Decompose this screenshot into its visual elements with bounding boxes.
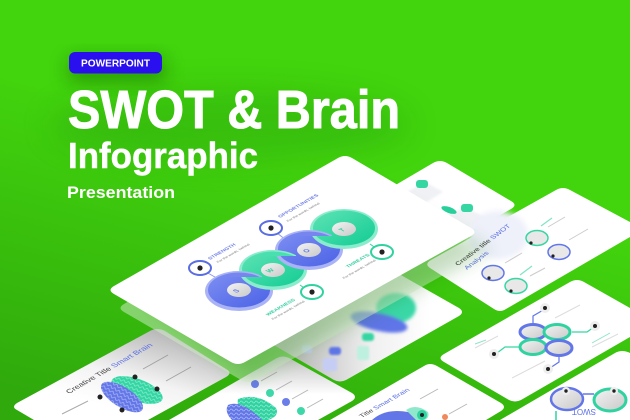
slide: bottom center brain <box>330 364 504 420</box>
slide title text: Creative title SWOT <box>454 223 513 267</box>
icon: threats <box>370 244 393 259</box>
main slide shadow <box>140 175 490 380</box>
label: strength: STRENGTH <box>207 243 238 261</box>
inner disc T: T <box>338 228 347 233</box>
label: opportunities: OPPORTUNITIES <box>277 193 321 219</box>
cycle circles <box>551 387 626 420</box>
overlap S <box>228 271 262 277</box>
list bullets <box>251 372 323 415</box>
slide title text: Creative Title Smart Brain <box>64 342 155 395</box>
circle W <box>239 250 307 290</box>
icon dots <box>98 374 160 412</box>
translucent glass layer <box>120 174 484 382</box>
POWERPOINT badge <box>69 52 162 74</box>
inner disc S: S <box>232 288 242 294</box>
label: strength: For the words, behind <box>216 243 251 264</box>
slide: four-circle SWOT <box>440 280 630 402</box>
circle S <box>205 271 273 311</box>
slide subtitle text: Analysis <box>463 250 491 271</box>
slide: bottom left brain <box>14 329 230 420</box>
circles S W T O <box>520 324 572 356</box>
label: weakness: WEAKNESS <box>265 298 298 317</box>
blurred brain graphic <box>349 293 416 337</box>
inner disc S <box>227 283 251 297</box>
slide: blurred brain <box>253 262 462 382</box>
hexagon nodes <box>482 230 570 294</box>
captions <box>62 355 191 414</box>
subtitle: Infographic: Infographic <box>68 135 258 176</box>
slide: bottom center list <box>169 356 355 420</box>
label: threats: For the words, behind <box>342 259 377 280</box>
orange bullet <box>442 414 448 420</box>
captions <box>475 305 618 378</box>
icon: opportunities <box>260 221 286 240</box>
label: opportunities: For the words, behind <box>286 202 321 223</box>
inner disc T <box>332 222 356 236</box>
title shadow <box>50 90 410 160</box>
brain <box>96 370 166 418</box>
connectors <box>497 309 594 368</box>
subtitle: Presentation: Presentation <box>67 183 175 202</box>
title: SWOT & Brain: SWOT & Brain <box>68 80 400 140</box>
inner disc W <box>261 263 285 277</box>
badge shadow <box>68 58 166 82</box>
overlap O <box>298 230 332 236</box>
label: weakness: For the words, behind <box>271 300 306 321</box>
icon: strength <box>189 261 222 281</box>
slide title text: Title Smart Brain <box>358 388 412 419</box>
circle T <box>310 209 378 249</box>
inner disc O: O <box>302 248 312 254</box>
inner disc O <box>297 243 321 257</box>
label: SWOT <box>572 407 596 416</box>
blurred tiles <box>302 333 374 371</box>
slide: top right icons <box>346 161 514 260</box>
slide: hexagon SWOT analysis <box>427 188 630 311</box>
slide: SWOT cycle <box>500 351 630 420</box>
main slide: SWOT circles <box>110 156 474 364</box>
label: threats: THREATS <box>345 253 372 269</box>
icon circle <box>417 410 427 420</box>
overlap W <box>262 250 296 256</box>
POWERPOINT badge: POWERPOINT <box>81 58 150 70</box>
brain <box>227 397 277 420</box>
brain <box>372 407 428 420</box>
icon: weakness <box>300 285 323 299</box>
inner disc W: W <box>265 267 277 274</box>
outer icons <box>489 303 600 374</box>
circle O <box>275 230 343 270</box>
